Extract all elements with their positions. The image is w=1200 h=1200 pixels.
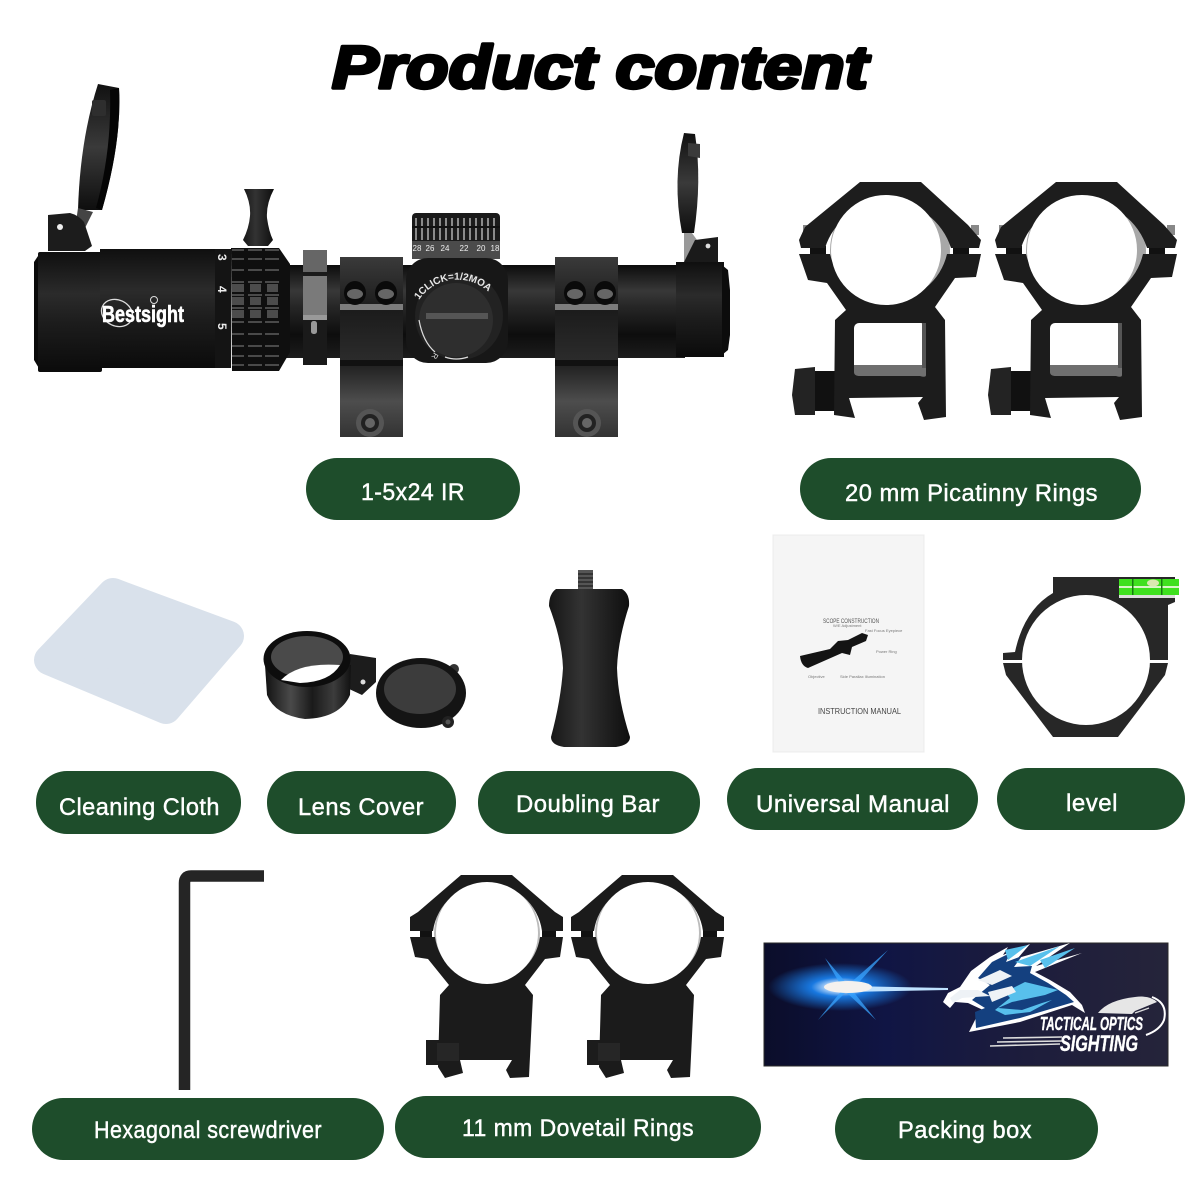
label pill: Cleaning Cloth bbox=[36, 771, 241, 834]
cylinder ring bbox=[264, 631, 351, 719]
manual callouts: Objective bbox=[808, 674, 825, 679]
label pill: level: level bbox=[1066, 790, 1118, 817]
manual title text: INSTRUCTION MANUAL bbox=[818, 707, 901, 716]
label pill: level bbox=[997, 768, 1185, 830]
lid bbox=[376, 658, 466, 728]
dovetail ring right bbox=[571, 875, 724, 1078]
product: lens cover bbox=[264, 631, 466, 728]
knurled zoom ring bbox=[231, 248, 290, 371]
collar bbox=[303, 250, 327, 365]
gauge icon bbox=[1098, 997, 1165, 1035]
product: cleaning cloth bbox=[49, 593, 229, 709]
label pill: 11 mm Dovetail Rings: 11 mm Dovetail Rings bbox=[462, 1115, 694, 1142]
label pill: 11 mm Dovetail Rings bbox=[395, 1096, 761, 1158]
turret: 28 bbox=[413, 244, 422, 253]
product: 1-5x24 IR scope bbox=[34, 84, 730, 437]
picatinny ring right bbox=[988, 182, 1177, 420]
turret: 20 bbox=[477, 244, 486, 253]
manual callouts: Side Parallax Illumination bbox=[840, 674, 885, 679]
label pill: Universal Manual bbox=[727, 768, 978, 830]
product: hexagonal screwdriver bbox=[184, 876, 264, 1090]
label pill: Cleaning Cloth: Cleaning Cloth bbox=[59, 794, 220, 821]
label pill: Lens Cover: Lens Cover bbox=[298, 794, 424, 821]
label pill: 20 mm Picatinny Rings: 20 mm Picatinny Rings bbox=[845, 480, 1098, 507]
label pill: Hexagonal screwdriver: Hexagonal screwdriver bbox=[94, 1117, 322, 1144]
magnification numbers: 3 bbox=[215, 254, 229, 261]
blue light flare bbox=[768, 950, 948, 1020]
logo bbox=[97, 294, 184, 332]
magnification numbers bbox=[215, 254, 229, 330]
label pill: Doubling Bar bbox=[478, 771, 700, 834]
scope tube bbox=[285, 265, 685, 358]
product: packing box bbox=[764, 943, 1168, 1066]
manual callouts: Power Ring bbox=[876, 649, 897, 654]
turret: R bbox=[429, 351, 440, 361]
manual callouts bbox=[808, 623, 903, 679]
turret: 22 bbox=[460, 244, 469, 253]
product: universal manual bbox=[773, 535, 924, 752]
left flip cap bbox=[48, 84, 119, 251]
magnification numbers: 4 bbox=[215, 286, 229, 293]
bar body bbox=[549, 589, 630, 747]
manual small heading: SCOPE CONSTRUCTION bbox=[823, 618, 879, 625]
label pill: Doubling Bar: Doubling Bar bbox=[516, 791, 660, 818]
turret: 26 bbox=[426, 244, 435, 253]
box text: SIGHTING: SIGHTING bbox=[1060, 1031, 1138, 1056]
picatinny ring left bbox=[792, 182, 981, 420]
magnification numbers: 5 bbox=[215, 323, 229, 330]
label pill: Lens Cover bbox=[267, 771, 456, 834]
label pill: 1-5x24 IR bbox=[306, 458, 520, 520]
label pill: Universal Manual: Universal Manual bbox=[756, 791, 950, 818]
objective bell bbox=[34, 249, 231, 372]
box text: TACTICAL OPTICS: TACTICAL OPTICS bbox=[1040, 1014, 1143, 1034]
label pill: 20 mm Picatinny Rings bbox=[800, 458, 1141, 520]
label pill: Packing box: Packing box bbox=[898, 1117, 1032, 1144]
turret bbox=[406, 213, 508, 363]
manual callouts: Fast Focus Eyepiece bbox=[865, 628, 903, 633]
speed lines bbox=[990, 1037, 1062, 1046]
logo: Bestsight bbox=[102, 301, 184, 327]
threaded screw bbox=[578, 570, 593, 592]
bubble vial bbox=[1119, 579, 1179, 598]
product: 11 mm dovetail rings bbox=[410, 875, 724, 1078]
turret: 18 bbox=[491, 244, 500, 253]
hinge bbox=[347, 654, 376, 695]
title: Product content bbox=[332, 34, 872, 101]
doubling bar on zoom ring bbox=[243, 189, 274, 246]
product: doubling bar bbox=[549, 570, 630, 747]
turret: 24 bbox=[441, 244, 450, 253]
manual scope illustration bbox=[800, 633, 868, 668]
manual callouts: W/E Adjustment bbox=[833, 623, 862, 628]
scope ring left bbox=[340, 257, 403, 437]
scope ring right bbox=[555, 257, 618, 437]
label pill: 1-5x24 IR: 1-5x24 IR bbox=[361, 479, 465, 506]
eagle emblem bbox=[943, 943, 1085, 1032]
right flip cap bbox=[677, 133, 718, 263]
label pill: Packing box bbox=[835, 1098, 1098, 1160]
dovetail ring left bbox=[410, 875, 563, 1078]
product: 20 mm picatinny rings bbox=[792, 182, 1177, 420]
turret: 1CLICK=1/2MOA bbox=[414, 272, 490, 300]
product: level bbox=[1003, 577, 1179, 737]
label pill: Hexagonal screwdriver bbox=[32, 1098, 384, 1160]
eyepiece bell bbox=[676, 262, 730, 357]
